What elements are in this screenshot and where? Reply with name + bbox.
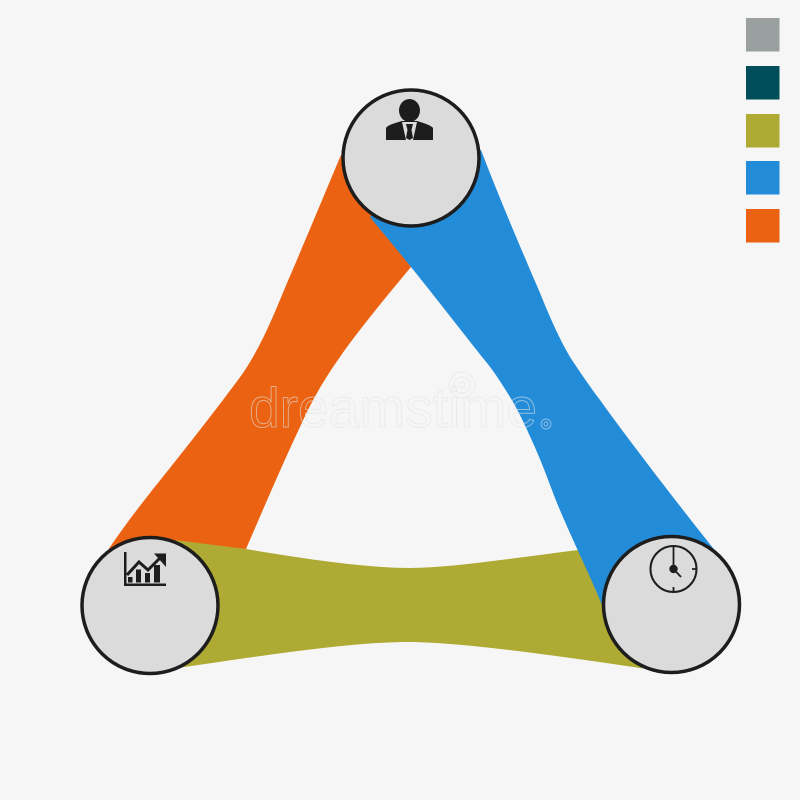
node: right circle with clock icon bbox=[604, 536, 740, 672]
band: blue right bbox=[370, 150, 717, 605]
node: top circle with person icon bbox=[343, 90, 479, 226]
watermark: dreamstime bbox=[249, 376, 537, 439]
icon: businessman bbox=[386, 99, 433, 140]
node: left circle with chart icon bbox=[82, 538, 218, 674]
icon: growth chart bbox=[124, 552, 166, 586]
icon: clock bbox=[650, 546, 697, 592]
band: orange left bbox=[108, 155, 411, 550]
band: olive bottom bbox=[150, 534, 660, 671]
legend swatches bbox=[746, 18, 780, 242]
